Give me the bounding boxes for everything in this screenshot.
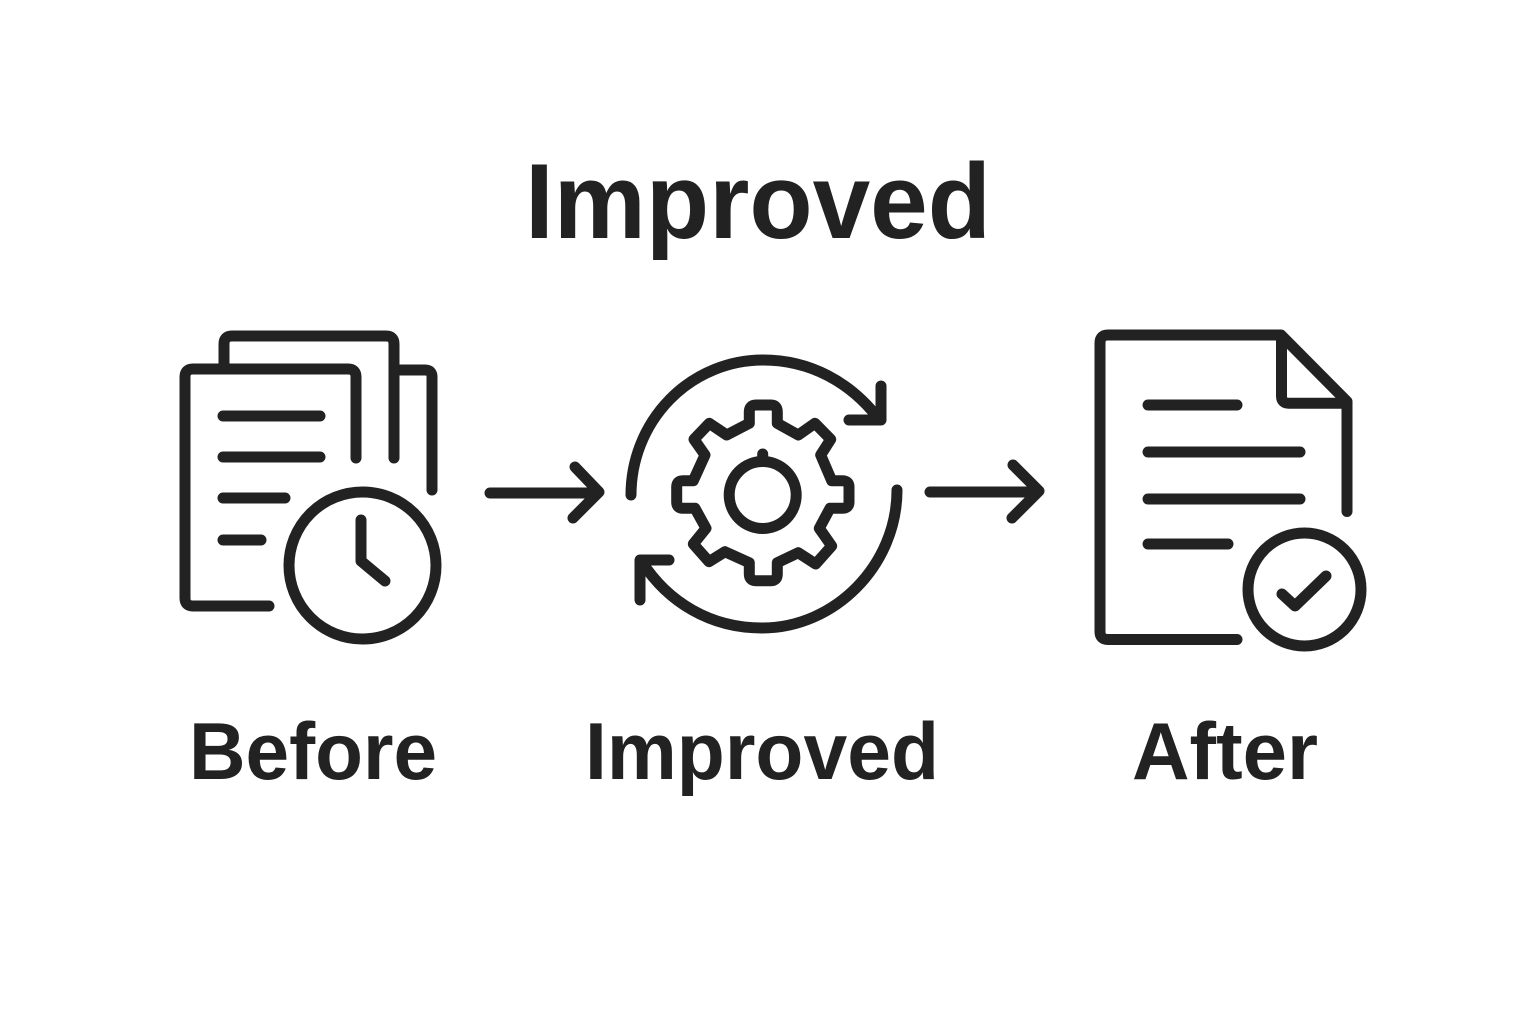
arrow: improved to after [930,465,1039,518]
label: before: Before [189,707,437,797]
icon: improved gear with cycle arrows [631,360,897,628]
title: Improved [525,141,991,261]
icon: after document with check [1100,335,1361,646]
label: improved: Improved [585,707,939,797]
icon: before documents with clock [185,336,436,639]
label: after: After [1132,707,1318,797]
arrow: before to improved [490,467,599,518]
